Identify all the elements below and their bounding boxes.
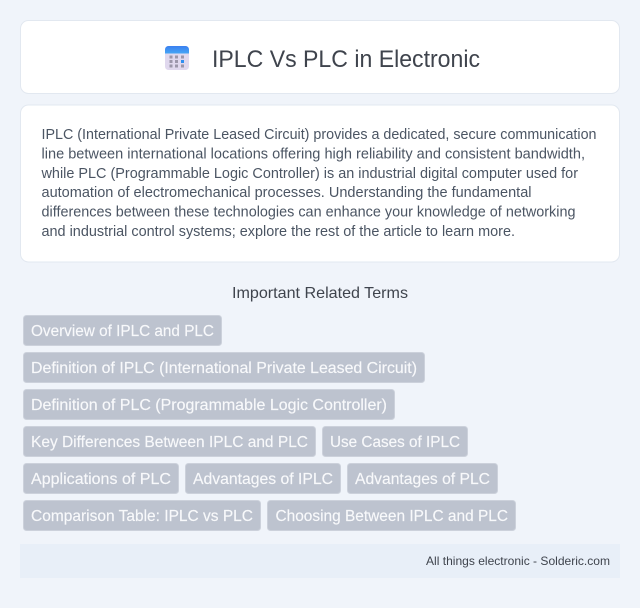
text block: description: while PLC (Programmable Logic Controller) is an industrial digital computer used for xyxy=(41,165,578,182)
chip: definition of PLC: Definition of PLC (Programmable Logic Controller) xyxy=(31,397,387,414)
icon: calendar grid xyxy=(165,46,189,70)
chip: use cases xyxy=(322,426,468,456)
chip: advantages of PLC: Advantages of PLC xyxy=(355,471,490,488)
chip: definition of PLC xyxy=(24,390,394,420)
chip: comparison table xyxy=(24,500,260,530)
term chips xyxy=(24,316,516,530)
panel: description xyxy=(20,105,620,262)
text block: description: line between international locations offering high reliability and consistent bandwidth, xyxy=(42,146,585,162)
title: IPLC Vs PLC in Electronic xyxy=(212,46,480,73)
text block: description: differences between these technologies can enhance your knowledge of networking xyxy=(42,204,576,220)
chip: use cases: Use Cases of IPLC xyxy=(330,434,460,451)
chip: choosing: Choosing Between IPLC and PLC xyxy=(276,508,508,525)
chip: applications xyxy=(24,464,178,494)
chip: advantages of IPLC: Advantages of IPLC xyxy=(193,471,333,488)
chip: definition of IPLC xyxy=(24,352,424,382)
text block: description: IPLC (International Private Leased Circuit) provides a dedicated, secure communication xyxy=(42,126,596,143)
text block: description xyxy=(41,126,597,240)
header panel xyxy=(20,20,620,94)
chip: choosing xyxy=(268,500,516,530)
chip: comparison table: Comparison Table: IPLC vs PLC xyxy=(31,508,253,525)
text block: description: automation of electromechanical processes. Understanding the fundamental xyxy=(42,184,532,201)
heading: related terms: Important Related Terms xyxy=(232,285,408,302)
footer xyxy=(20,544,620,578)
chip: applications: Applications of PLC xyxy=(31,471,171,488)
text block: description: and industrial control systems; explore the rest of the article to learn more. xyxy=(42,223,515,240)
chip: advantages of IPLC xyxy=(186,464,340,494)
chip: definition of IPLC: Definition of IPLC (International Private Leased Circuit) xyxy=(31,360,417,377)
chip: advantages of PLC xyxy=(348,464,498,494)
chip: overview: Overview of IPLC and PLC xyxy=(31,323,214,340)
chip: overview xyxy=(24,316,222,346)
chip: key differences: Key Differences Between IPLC and PLC xyxy=(31,434,308,451)
chip: key differences xyxy=(24,426,316,456)
footer credit: All things electronic - Solderic.com xyxy=(426,554,610,568)
